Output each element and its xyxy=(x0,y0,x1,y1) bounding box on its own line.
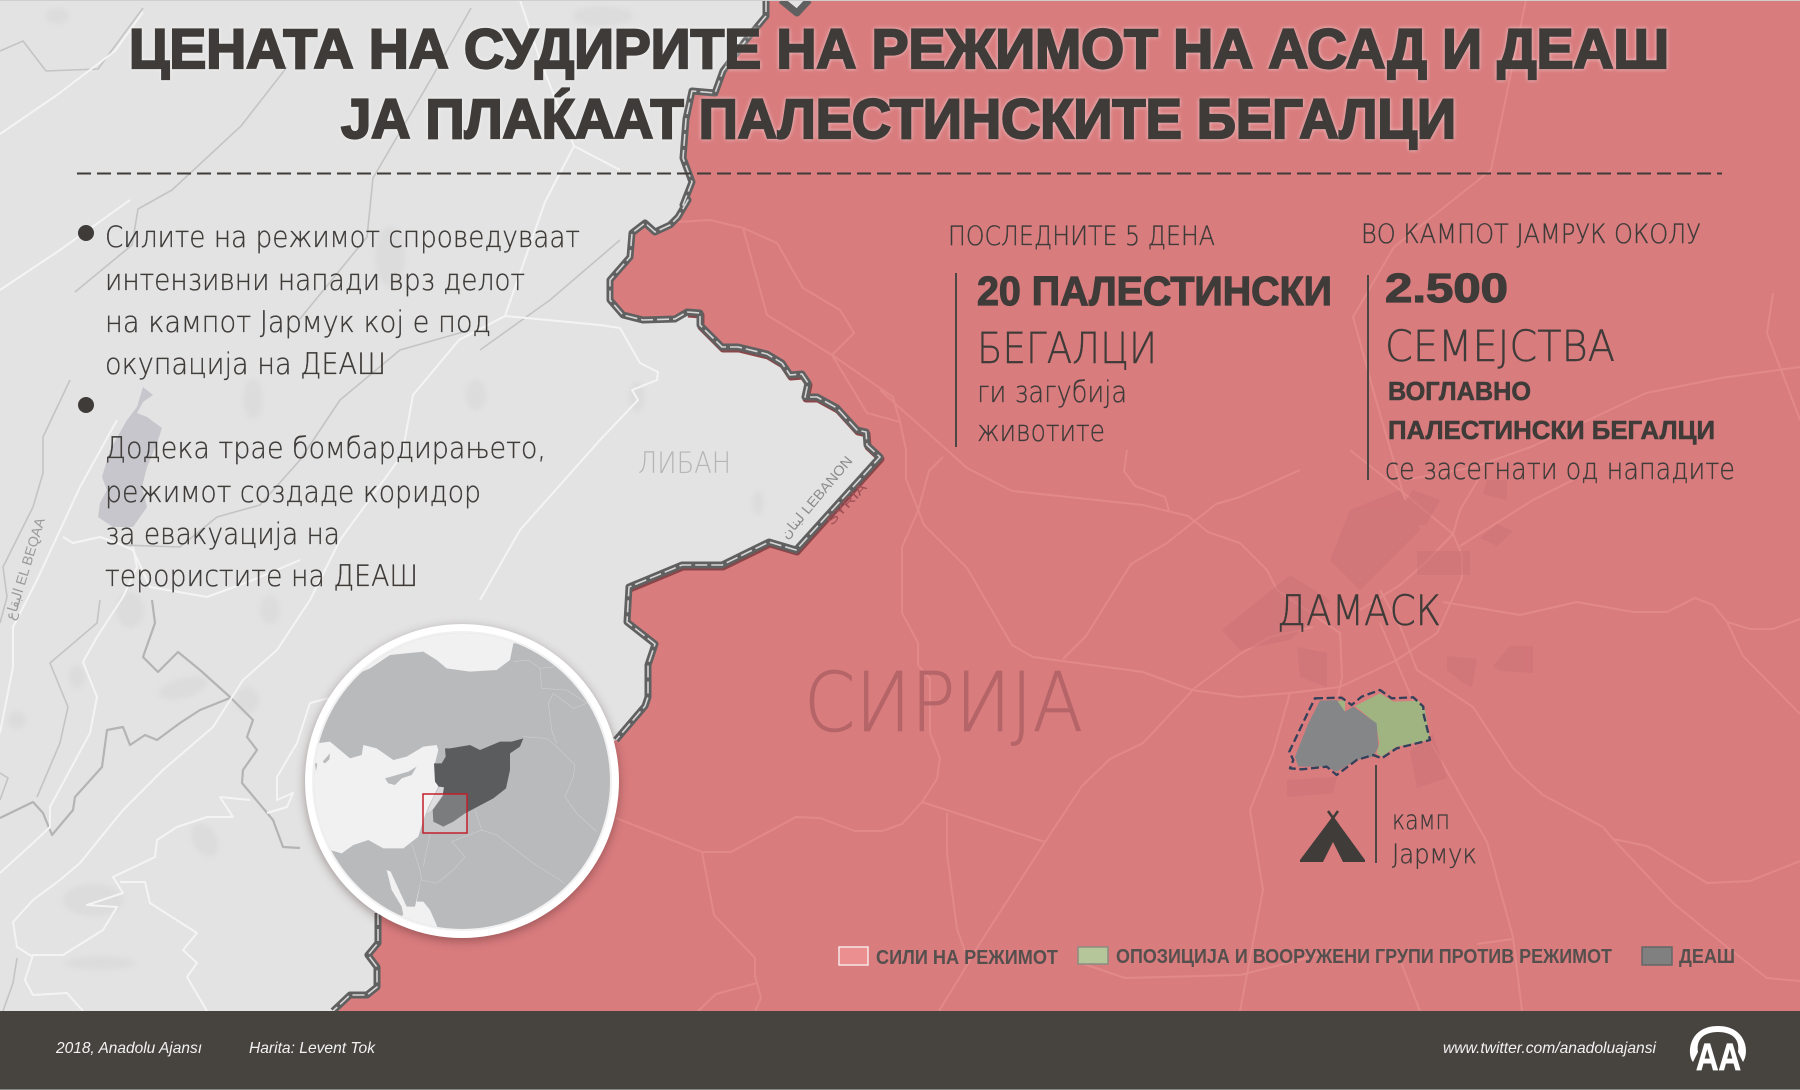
Mediterranean xyxy=(300,742,438,853)
Black Sea xyxy=(362,633,516,672)
roads on Syria side xyxy=(616,0,1800,1011)
Yarmouk camp zones xyxy=(1289,690,1430,775)
bullet text block 1: на кампот Јармук кој е под xyxy=(105,305,491,339)
label: border Syria: SYRIA xyxy=(823,479,870,528)
statistic: last 5 days xyxy=(948,221,1332,448)
legend: regime forces: СИЛИ НА РЕЖИМОТ xyxy=(876,947,1058,969)
Aegean islands xyxy=(315,753,330,772)
inset frame xyxy=(305,624,619,938)
statistic: Yarmouk families: се засегнати од нападите xyxy=(1385,452,1735,486)
camp dashed outline xyxy=(1289,690,1430,775)
map credit: Harita: Levent Tok xyxy=(249,1040,376,1057)
legend: opposition: ОПОЗИЦИЈА И ВООРУЖЕНИ ГРУПИ ПРОТИВ РЕЖИМОТ xyxy=(1116,946,1612,968)
bullet text block 2: Додека трае бомбардирањето, xyxy=(105,431,546,465)
statistic: Yarmouk families: ПАЛЕСТИНСКИ БЕГАЛЦИ xyxy=(1388,415,1715,445)
statistic: last 5 days: ги загубија xyxy=(977,375,1127,409)
icon: tent xyxy=(1300,811,1365,862)
Lebanon xyxy=(427,787,444,813)
bullet text block 2: терористите на ДЕАШ xyxy=(105,559,418,593)
camp callout: Јармук xyxy=(1392,839,1477,870)
title: ЦЕНАТА НА СУДИРИТЕ НА РЕЖИМОТ НА АСАД И ДЕАШ xyxy=(129,17,1669,80)
country borders xyxy=(412,660,597,883)
bullet text block 1: интензивни напади врз делот xyxy=(105,263,525,297)
inset locator map xyxy=(300,620,620,940)
Red Sea gulfs xyxy=(386,870,437,927)
label: Syria: СИРИЈА xyxy=(804,656,1083,751)
legend xyxy=(839,946,1735,969)
land xyxy=(314,633,610,929)
bullet text block 2 xyxy=(78,397,546,593)
legend: DAESH: ДЕАШ xyxy=(1679,946,1735,968)
statistic: Yarmouk families: 2.500 xyxy=(1385,265,1508,311)
map labels xyxy=(2,446,1441,751)
lake xyxy=(98,387,162,527)
title xyxy=(129,17,1669,150)
credit: 2018, Anadolu Ajansı xyxy=(55,1040,202,1057)
Damascus urban area xyxy=(1222,480,1533,797)
regime-controlled area xyxy=(333,0,1800,1011)
Syria xyxy=(433,738,523,827)
legend: DAESH xyxy=(1642,946,1735,968)
zone: opposition xyxy=(1338,693,1430,757)
label: Lebanon: ЛИБАН xyxy=(638,446,731,480)
statistic: Yarmouk families: СЕМЕЈСТВА xyxy=(1385,322,1615,372)
statistic: Yarmouk families: ВО КАМПОТ ЈАМРУК ОКОЛУ xyxy=(1361,219,1701,250)
bullet text block 2: за евакуација на xyxy=(105,517,340,551)
footer bar xyxy=(0,1011,1800,1090)
bullet text block 1: окупација на ДЕАШ xyxy=(105,347,386,381)
bullet text block 2: режимот создаде коридор xyxy=(105,475,481,509)
bullet text block 1: Силите на режимот спроведуваат xyxy=(105,220,580,254)
zone: DAESH xyxy=(1295,700,1378,772)
bullet text block 1 xyxy=(78,220,580,381)
title: ЈА ПЛАЌААТ ПАЛЕСТИНСКИТЕ БЕГАЛЦИ xyxy=(341,87,1456,150)
statistic: last 5 days: БЕГАЛЦИ xyxy=(977,324,1157,374)
Cyprus xyxy=(385,767,417,785)
twitter address: www.twitter.com/anadoluajansi xyxy=(1443,1040,1656,1057)
label: border Lebanon: لبنان LEBANON xyxy=(777,453,856,542)
camp callout xyxy=(1300,765,1477,870)
border line xyxy=(333,0,881,1011)
statistic: last 5 days: ПОСЛЕДНИТЕ 5 ДЕНА xyxy=(948,221,1215,252)
logo: AA: AA xyxy=(1696,1037,1741,1079)
statistic: Yarmouk families: ВОГЛАВНО xyxy=(1388,376,1531,406)
locator box xyxy=(423,794,467,833)
camp name: камп xyxy=(1392,805,1450,836)
statistic: last 5 days: животите xyxy=(977,414,1105,448)
statistic: last 5 days: 20 ПАЛЕСТИНСКИ xyxy=(977,268,1332,314)
label: Damascus: ДАМАСК xyxy=(1277,586,1441,635)
statistic: Yarmouk families xyxy=(1361,219,1735,486)
leader line xyxy=(1375,765,1377,863)
label: El Beqaa: البقاع EL BEQAA xyxy=(2,515,49,622)
logo: AA xyxy=(1690,1026,1746,1079)
